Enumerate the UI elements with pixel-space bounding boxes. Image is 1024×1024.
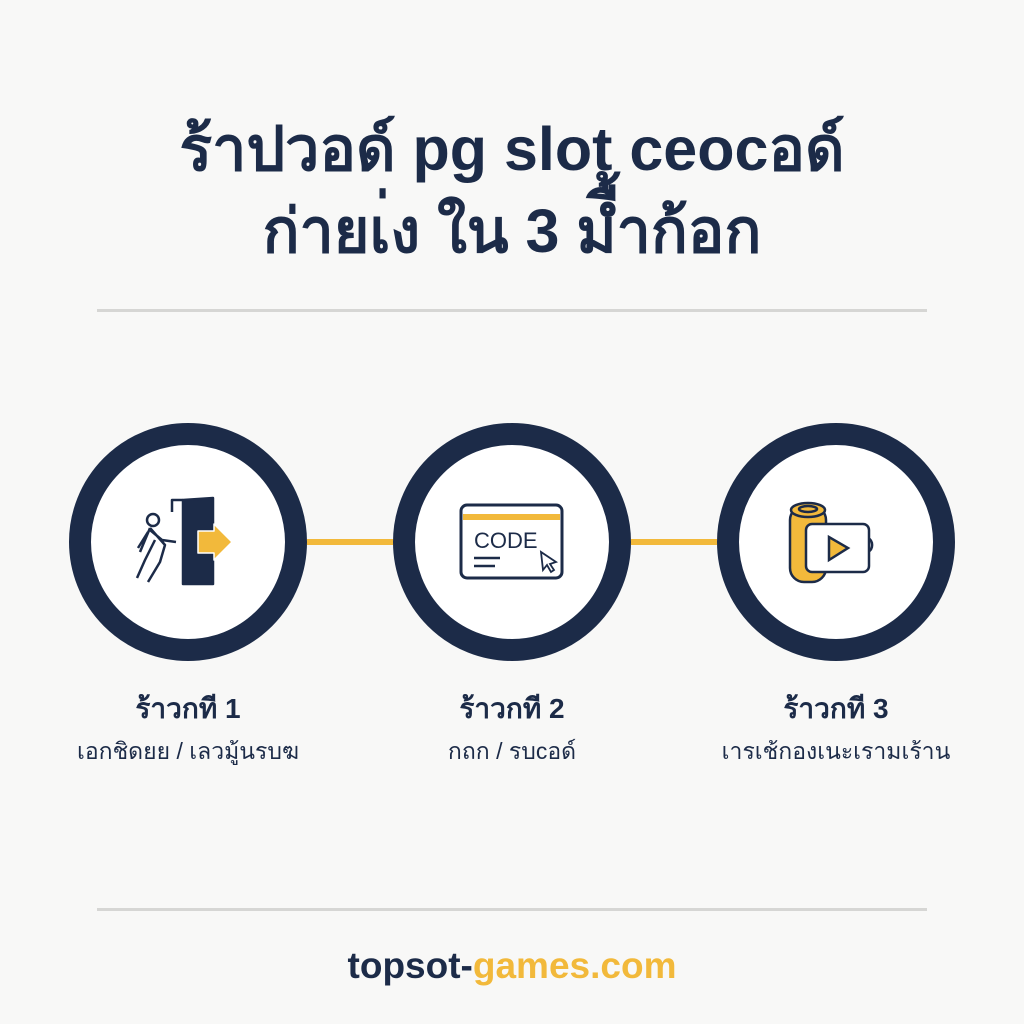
step 1 label: เอกชิดยย / เลวมู้นรบฆ bbox=[77, 738, 299, 764]
step 2 label bbox=[448, 693, 576, 764]
title: ก่ายเ่ง ใน 3 มื้ำก้อก bbox=[263, 197, 761, 265]
icon: exit door bbox=[137, 498, 232, 584]
steps diagram bbox=[69, 423, 955, 661]
title bbox=[179, 115, 845, 265]
step 1 label: ร้าวกที 1 bbox=[135, 693, 241, 724]
step 1 label bbox=[77, 693, 299, 765]
circle 2 bbox=[404, 434, 620, 650]
footer url: topsot-games.com bbox=[348, 945, 676, 986]
icon: code window: CODE bbox=[474, 528, 538, 553]
step 2 label: กถก / รบcอด์ bbox=[448, 738, 576, 764]
circle 3 bbox=[728, 434, 944, 650]
circle 1 bbox=[80, 434, 296, 650]
icon: coins + play bbox=[790, 503, 872, 582]
step 3 label bbox=[722, 693, 950, 764]
icon: code window bbox=[461, 505, 562, 578]
step 2 label: ร้าวกที 2 bbox=[459, 693, 565, 724]
title: ร้าปวอด์ pg slot ceocอด์ bbox=[179, 115, 845, 183]
step 3 label: ร้าวกที 3 bbox=[783, 693, 889, 724]
step 3 label: เารเช้กองเนะเรามเร้าน bbox=[722, 738, 950, 764]
connector lines bbox=[307, 539, 717, 545]
